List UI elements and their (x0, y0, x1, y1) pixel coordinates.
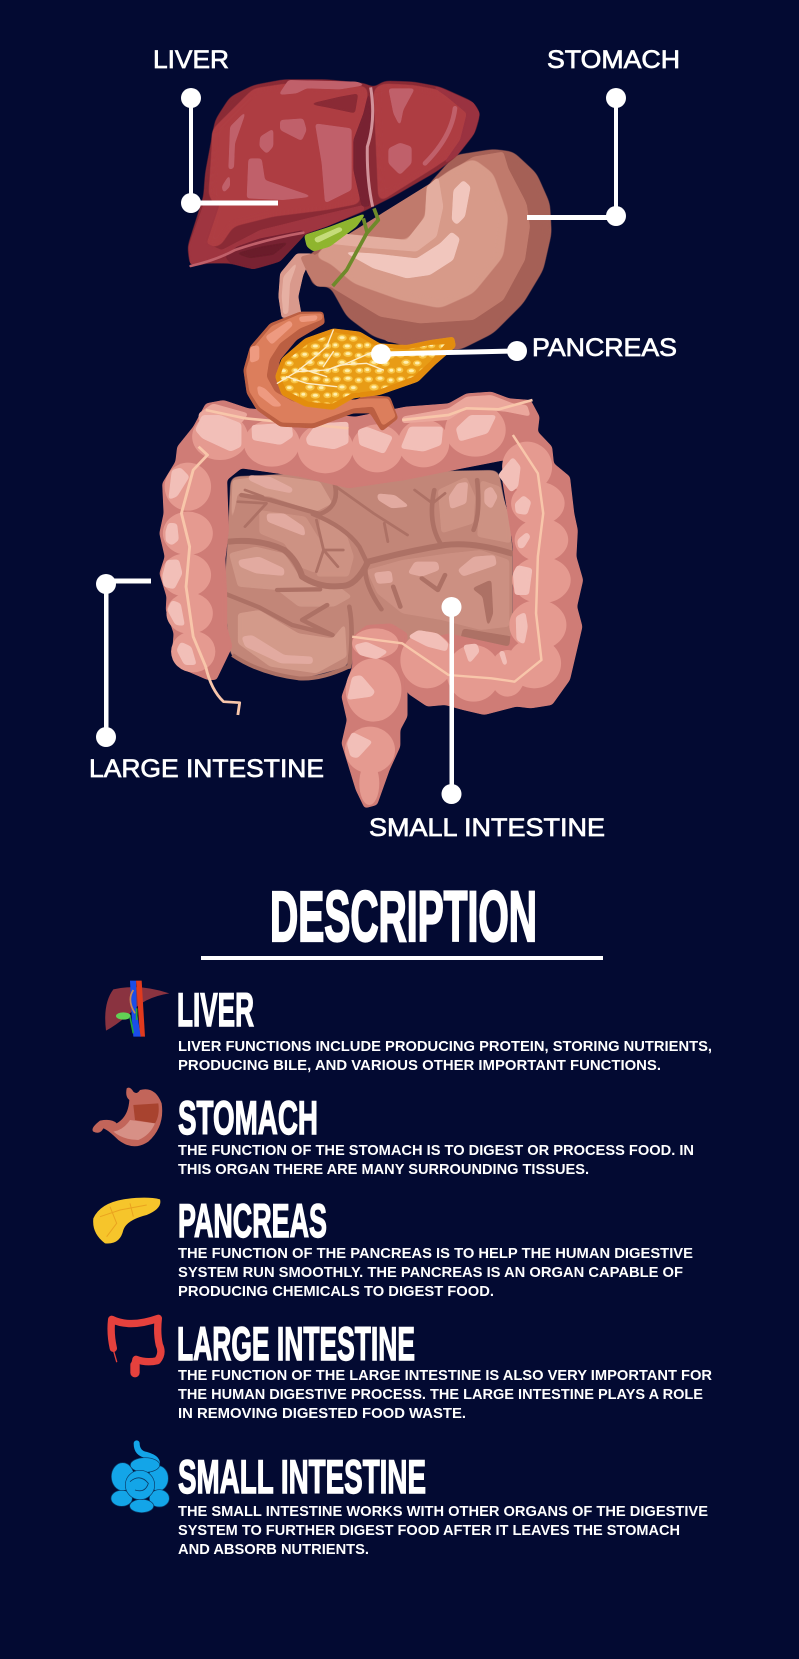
description: small intestine: THE SMALL INTESTINE WORKS WITH OTHER ORGANS OF THE DIGESTIVE (178, 1504, 708, 1520)
description: pancreas: SYSTEM RUN SMOOTHLY. THE PANCREAS IS AN ORGAN CAPABLE OF (178, 1265, 683, 1281)
description: small intestine: AND ABSORB NUTRIENTS. (178, 1542, 369, 1558)
description: stomach (178, 1143, 694, 1178)
gallbladder (304, 208, 378, 286)
description: large intestine: THE HUMAN DIGESTIVE PROCESS. THE LARGE INTESTINE PLAYS A ROLE (178, 1387, 703, 1403)
description: pancreas: THE FUNCTION OF THE PANCREAS IS TO HELP THE HUMAN DIGESTIVE (178, 1246, 693, 1262)
stomach (278, 149, 552, 350)
section title: DESCRIPTION (270, 878, 537, 957)
pointer: liver (181, 88, 278, 213)
liver (187, 79, 481, 269)
icon: small intestine (111, 1443, 169, 1513)
pointer: stomach (527, 88, 626, 226)
description: stomach: THIS ORGAN THERE ARE MANY SURROUNDING TISSUES. (178, 1162, 589, 1178)
large intestine (159, 392, 583, 808)
description: stomach: THE FUNCTION OF THE STOMACH IS TO DIGEST OR PROCESS FOOD. IN (178, 1143, 694, 1159)
heading: small intestine: SMALL INTESTINE (178, 1450, 426, 1503)
description: small intestine: SYSTEM TO FURTHER DIGEST FOOD AFTER IT LEAVES THE STOMACH (178, 1523, 680, 1539)
small and large intestine illustration (159, 392, 583, 808)
description: liver: LIVER FUNCTIONS INCLUDE PRODUCING PROTEIN, STORING NUTRIENTS, (178, 1039, 712, 1055)
label: liver: LIVER (153, 46, 229, 74)
label: pancreas: PANCREAS (532, 334, 677, 362)
title underline (201, 956, 603, 960)
pointer: large intestine (96, 574, 151, 747)
description: liver: PRODUCING BILE, AND VARIOUS OTHER IMPORTANT FUNCTIONS. (178, 1058, 661, 1074)
description: pancreas (178, 1246, 693, 1300)
organs: stomach, liver, gallbladder, duodenum, pancreas (187, 79, 552, 432)
scalloped outer segments (161, 403, 571, 805)
description: liver (178, 1039, 712, 1074)
label: large intestine: LARGE INTESTINE (89, 755, 324, 783)
label: stomach: STOMACH (547, 46, 680, 74)
duodenum (243, 312, 398, 432)
heading: pancreas: PANCREAS (178, 1194, 327, 1247)
small intestine (224, 470, 513, 679)
heading: large intestine: LARGE INTESTINE (177, 1317, 415, 1370)
description: large intestine (178, 1368, 712, 1422)
description: small intestine (178, 1504, 708, 1558)
pancreas (275, 328, 456, 410)
icon: large intestine (111, 1318, 161, 1373)
anatomy illustration (159, 79, 583, 808)
heading: stomach: STOMACH (178, 1091, 318, 1144)
heading: liver: LIVER (177, 983, 254, 1036)
description: large intestine: IN REMOVING DIGESTED FOOD WASTE. (178, 1406, 466, 1422)
pointer: pancreas (371, 341, 527, 364)
icon: stomach (92, 1088, 162, 1146)
icon: liver (105, 981, 169, 1037)
label: small intestine: SMALL INTESTINE (369, 814, 605, 842)
icon: pancreas (93, 1198, 160, 1243)
description: large intestine: THE FUNCTION OF THE LARGE INTESTINE IS ALSO VERY IMPORTANT FOR (178, 1368, 712, 1384)
description: pancreas: PRODUCING CHEMICALS TO DIGEST FOOD. (178, 1284, 494, 1300)
pointer: small intestine (442, 597, 462, 804)
